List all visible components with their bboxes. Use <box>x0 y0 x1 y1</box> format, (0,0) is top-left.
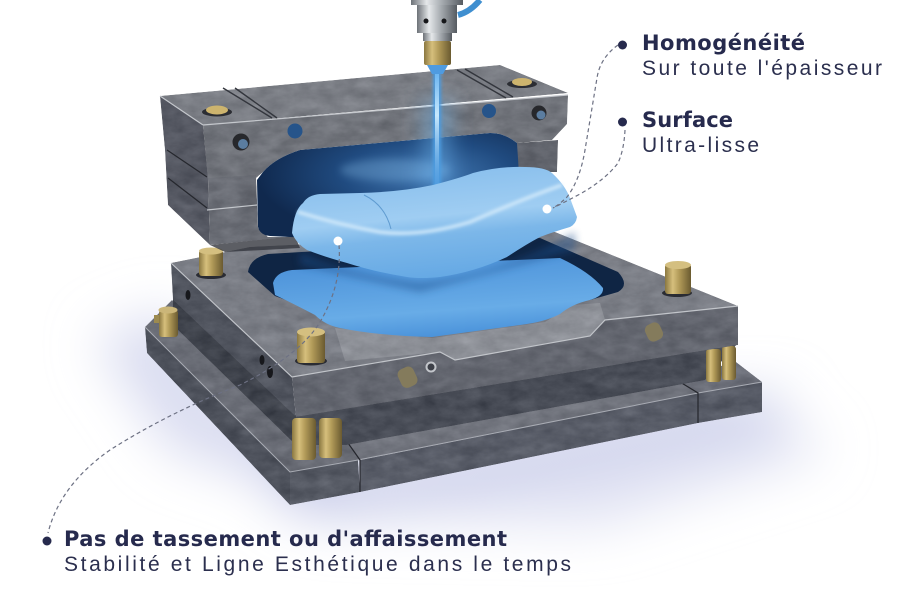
leader: homogénéité <box>553 45 618 208</box>
callout: surface: Surface <box>642 108 733 132</box>
shadow under upper mold <box>210 236 300 252</box>
pin: left <box>154 306 178 337</box>
brass guide pins, rear and lower <box>154 306 736 460</box>
callout: homogénéité: Homogénéité <box>642 31 805 55</box>
brass tip <box>424 41 451 65</box>
steel body <box>417 0 457 33</box>
brass guide pins, top <box>196 248 692 366</box>
top edge highlights <box>160 95 568 210</box>
callout: tassement <box>42 527 571 576</box>
blue holes <box>288 104 496 138</box>
brass inserts <box>202 78 537 116</box>
seat highlight ridge <box>298 185 562 233</box>
middle plate <box>173 298 738 445</box>
laser beam <box>424 70 450 192</box>
grooves <box>223 69 513 118</box>
foam seat <box>292 167 577 292</box>
upper mold <box>160 65 568 252</box>
callout: tassement: Stabilité et Ligne Esthétique dans le temps <box>64 553 571 576</box>
machined ledge <box>335 303 605 361</box>
sparkle cloud in cavity <box>340 159 450 181</box>
floor shadow <box>95 310 830 525</box>
vent holes <box>424 18 428 24</box>
callout: surface <box>618 108 759 157</box>
plate joints <box>348 382 698 492</box>
side holes <box>186 290 273 378</box>
callout: surface: Ultra-lisse <box>642 134 759 157</box>
pin: back right <box>662 261 692 297</box>
pin: front <box>295 328 327 366</box>
seat seam <box>364 195 391 229</box>
dark bolts <box>232 106 546 150</box>
pin pair: right <box>706 346 736 382</box>
bolts on front face <box>396 320 665 390</box>
cavity <box>257 133 520 238</box>
blue hose <box>458 0 480 15</box>
bottom plate <box>145 300 762 505</box>
seat shadow on foam <box>300 232 575 292</box>
cavity recess <box>248 238 624 320</box>
edge highlights on the bottom plate <box>145 327 762 472</box>
side seams <box>167 150 207 208</box>
leader: surface <box>553 130 625 208</box>
callout: homogénéité: Sur toute l'épaisseur <box>642 57 882 80</box>
lower mold plate <box>171 232 738 417</box>
callout: homogénéité <box>618 31 882 80</box>
callout: tassement: Pas de tassement ou d'affaissement <box>64 527 507 551</box>
pin pair: front <box>292 418 342 460</box>
leader: tassement <box>48 245 339 533</box>
edge highlights <box>171 263 738 377</box>
white markers on seat <box>334 204 552 246</box>
mold base <box>145 298 762 505</box>
pin: back left <box>196 248 226 279</box>
lower foam block <box>273 258 603 337</box>
dashed leader lines <box>48 45 625 533</box>
nozzle <box>411 0 480 74</box>
